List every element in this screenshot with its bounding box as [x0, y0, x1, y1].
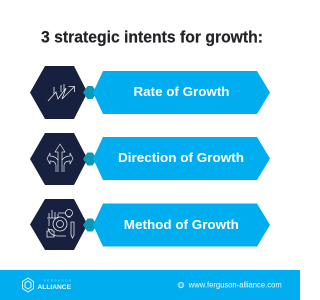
- hexagon: direction icon background: [30, 133, 88, 185]
- banner: method of growth: [93, 204, 270, 246]
- banner label: direction of growth: Direction of Growth: [118, 150, 244, 165]
- hexagon: rate icon background: [30, 66, 88, 119]
- panel: method of growth: [30, 199, 270, 250]
- banner: rate of growth: [93, 71, 270, 114]
- logo text: ferguson alliance: [38, 280, 72, 291]
- banner label: rate of growth: Rate of Growth: [134, 84, 230, 99]
- panel: direction of growth: [30, 133, 270, 185]
- banner: direction of growth: [93, 137, 270, 180]
- connector: direction: [83, 152, 97, 166]
- icon: process cog with tools: [47, 210, 74, 238]
- logo text: ferguson alliance: FERGUSON: [44, 280, 71, 282]
- banner label: method of growth: Method of Growth: [124, 217, 239, 232]
- icon: three-way arrows: [47, 144, 73, 172]
- icon: alliance logo: [22, 278, 34, 292]
- icon: globe: [178, 282, 184, 288]
- connector: rate: [83, 86, 97, 99]
- website url: www.ferguson-alliance.com: [188, 280, 282, 290]
- panel: rate of growth: [30, 66, 270, 119]
- connector: method: [83, 218, 97, 232]
- hexagon: method icon background: [30, 199, 88, 250]
- footer bar: [0, 270, 300, 300]
- logo text: ferguson alliance: ALLIANCE: [38, 284, 72, 291]
- icon: rising chart arrow: [48, 84, 74, 101]
- title: 3 strategic intents for growth:: [41, 28, 263, 46]
